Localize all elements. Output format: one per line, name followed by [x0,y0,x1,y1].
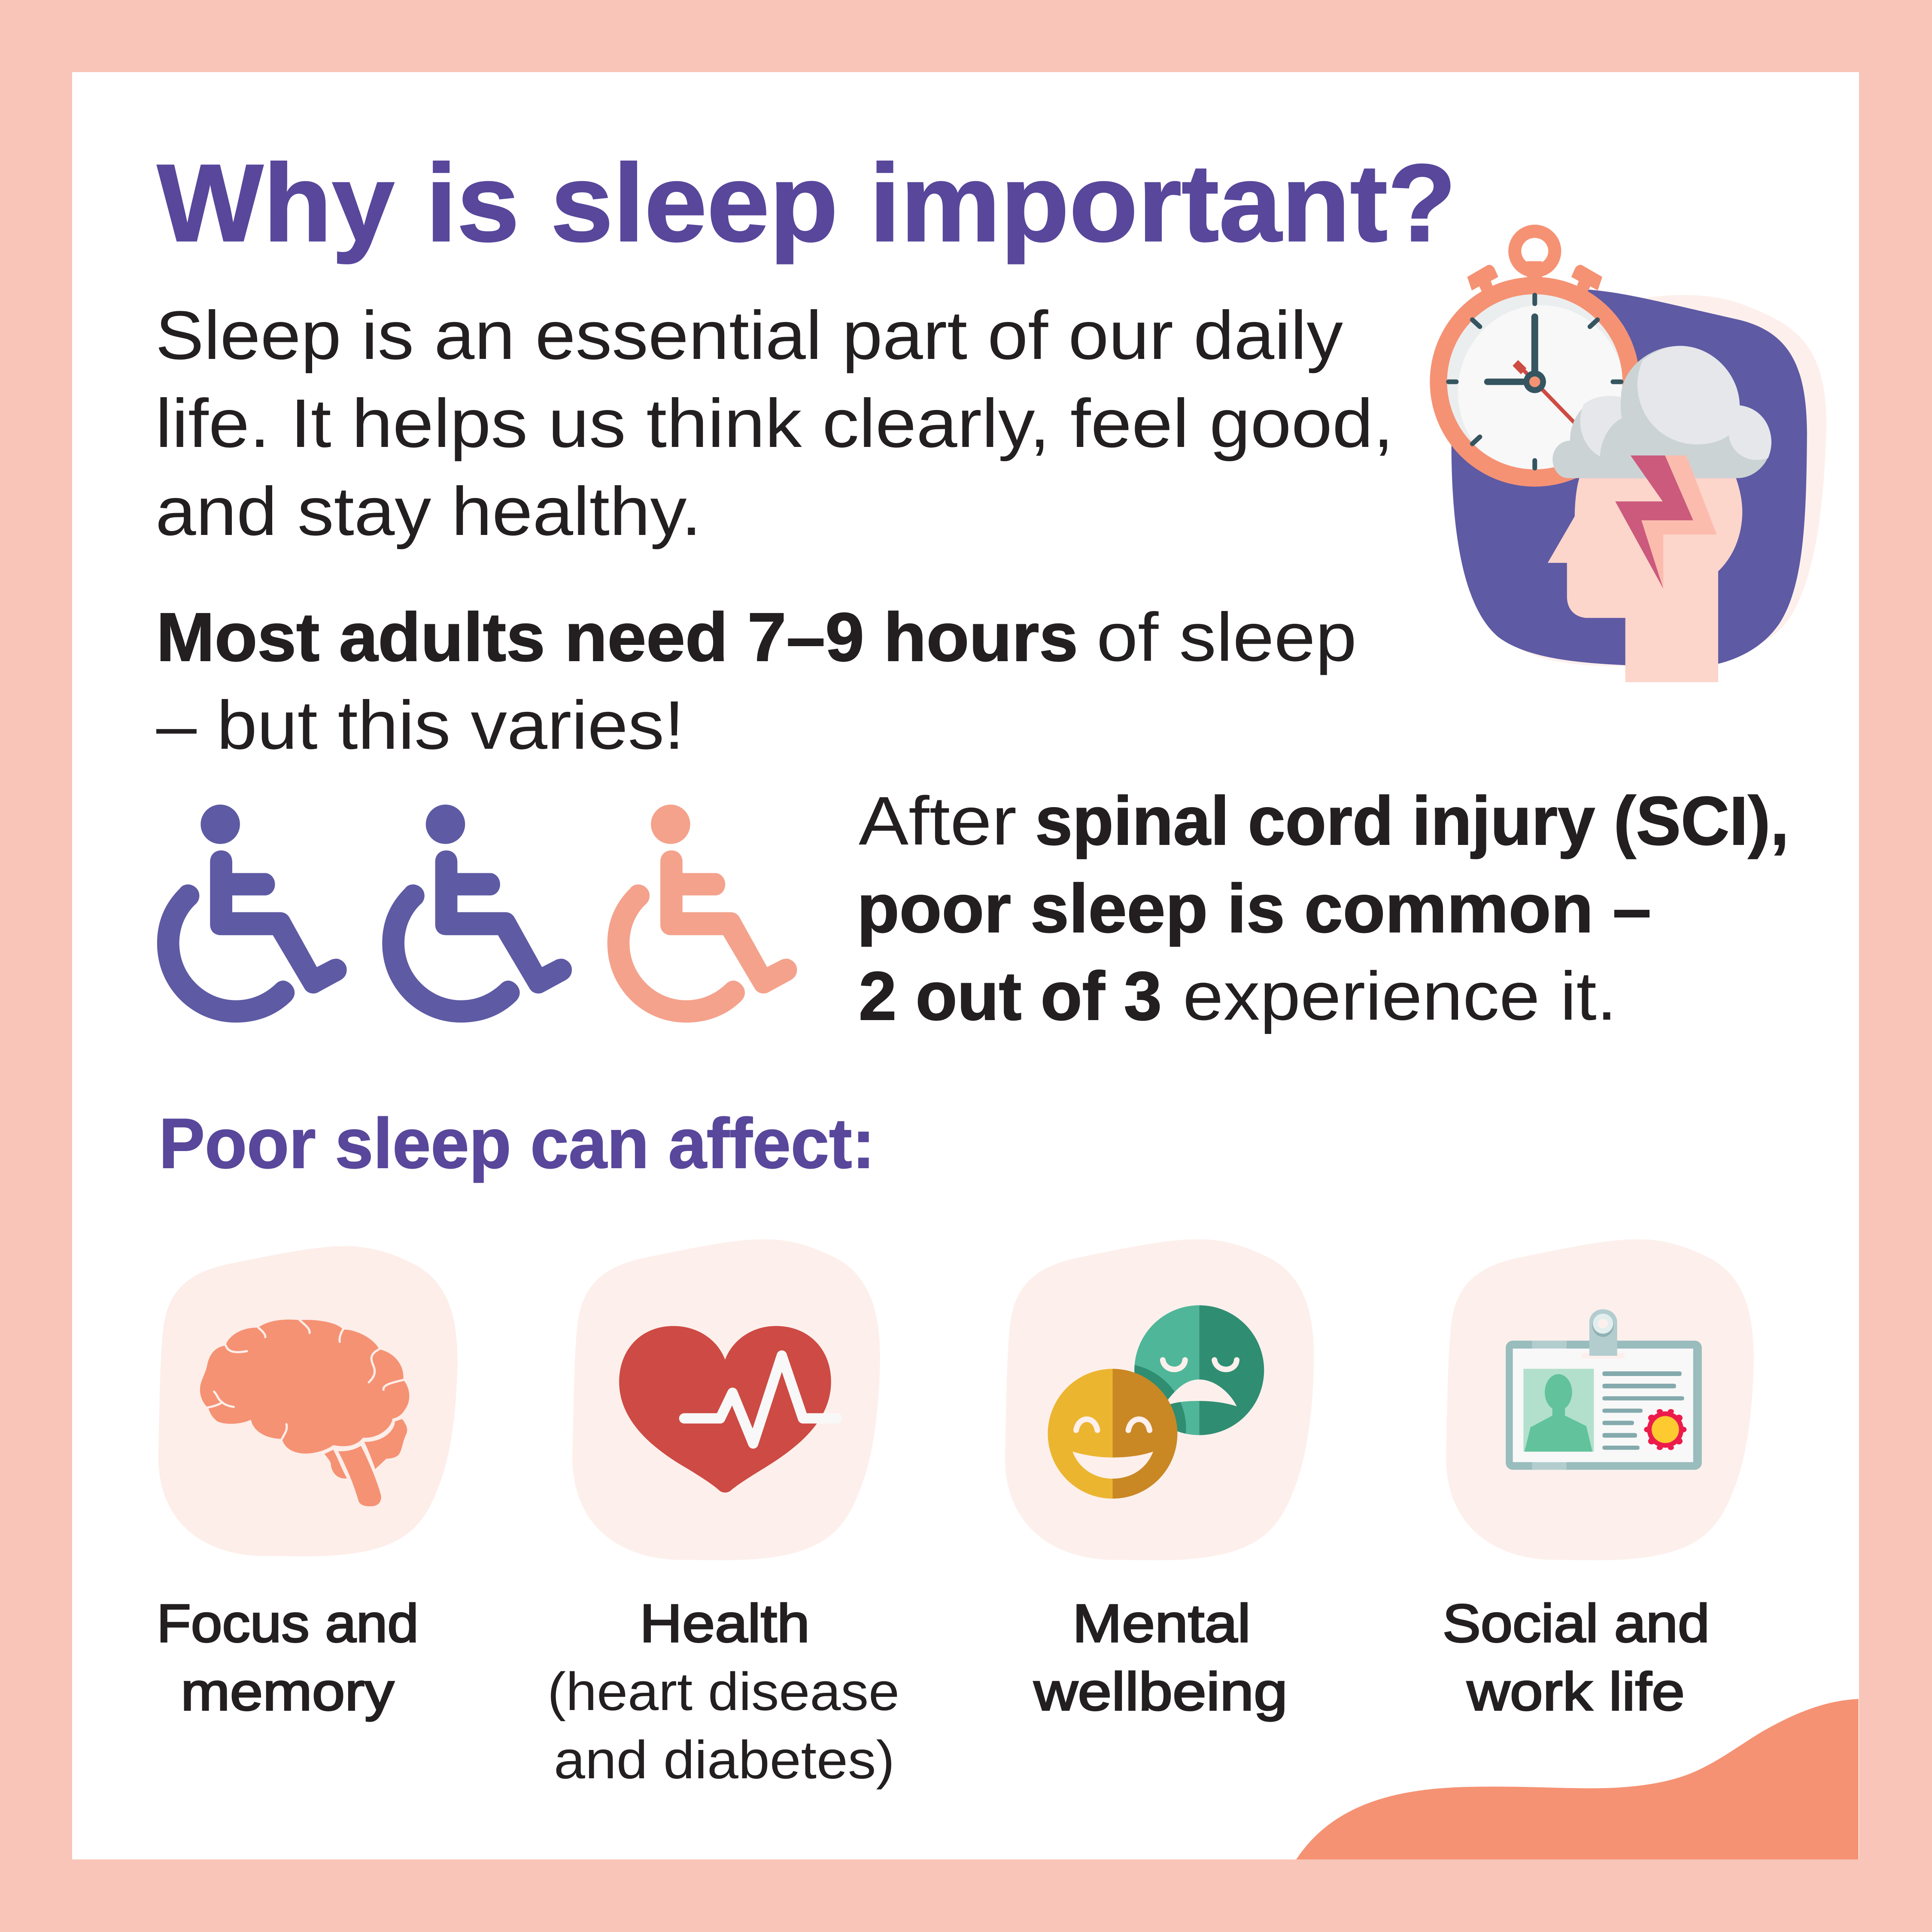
icon: ID badge [1506,1309,1702,1470]
label: Social and [1443,1594,1710,1653]
icon: wheelchair 1 [157,805,347,1023]
SCI text: experience it. [1183,957,1617,1034]
panel: social and work life [1443,1239,1754,1722]
label: Mental [1072,1594,1251,1653]
intro paragraph: Sleep is an essential part of our daily [155,297,1343,374]
panel: health [547,1239,899,1790]
sleep hours text: of sleep [1097,598,1357,675]
storm cloud [1552,346,1771,478]
blob background [572,1239,880,1560]
icon: happy and sad faces [1048,1305,1264,1499]
SCI text: 2 out of 3 [859,957,1162,1034]
label [157,1594,419,1722]
panel: focus and memory [157,1246,458,1722]
icon: wheelchair 2 [382,805,572,1023]
SCI text: spinal cord injury (SCI), [1035,782,1789,859]
SCI text [857,782,1789,1034]
label: and diabetes) [554,1730,895,1790]
subheading: Poor sleep can affect: [159,1104,875,1183]
intro paragraph [155,297,1394,550]
bolt front [1615,456,1693,589]
label [1443,1594,1710,1722]
SCI text: poor sleep is common – [857,870,1651,947]
purple blob [1452,289,1807,665]
label [547,1594,899,1790]
label: wellbeing [1033,1662,1288,1722]
panel: mental wellbeing [1005,1239,1314,1722]
icon: wheelchair 3 [608,805,797,1023]
wheelchair icons: 2 out of 3 [157,805,797,1023]
blob background [158,1246,458,1556]
lightning bolt [1641,456,1717,589]
label: work life [1467,1662,1685,1722]
SCI text: After [859,782,1017,859]
blob background [1005,1239,1314,1560]
intro paragraph: life. It helps us think clearly, feel good, [155,385,1394,462]
title: Why is sleep important? [157,142,1456,264]
bottom right wave [1296,1699,1859,1859]
label: memory [181,1662,395,1722]
label: (heart disease [547,1662,899,1722]
stopwatch [1430,225,1640,486]
intro paragraph: and stay healthy. [155,473,702,550]
label: Focus and [157,1594,419,1653]
pale blob [1507,295,1826,666]
icon: brain [200,1319,409,1507]
label [1033,1594,1288,1722]
illustration: stopwatch, head and storm cloud [1430,225,1826,682]
icon: heart with pulse [619,1326,837,1493]
sleep hours text: Most adults need 7–9 hours [156,598,1078,675]
head silhouette [1548,478,1742,682]
sleep hours text [156,598,1357,763]
sleep hours text: – but this varies! [156,687,684,763]
label: Health [640,1594,810,1653]
blob background [1446,1239,1754,1560]
